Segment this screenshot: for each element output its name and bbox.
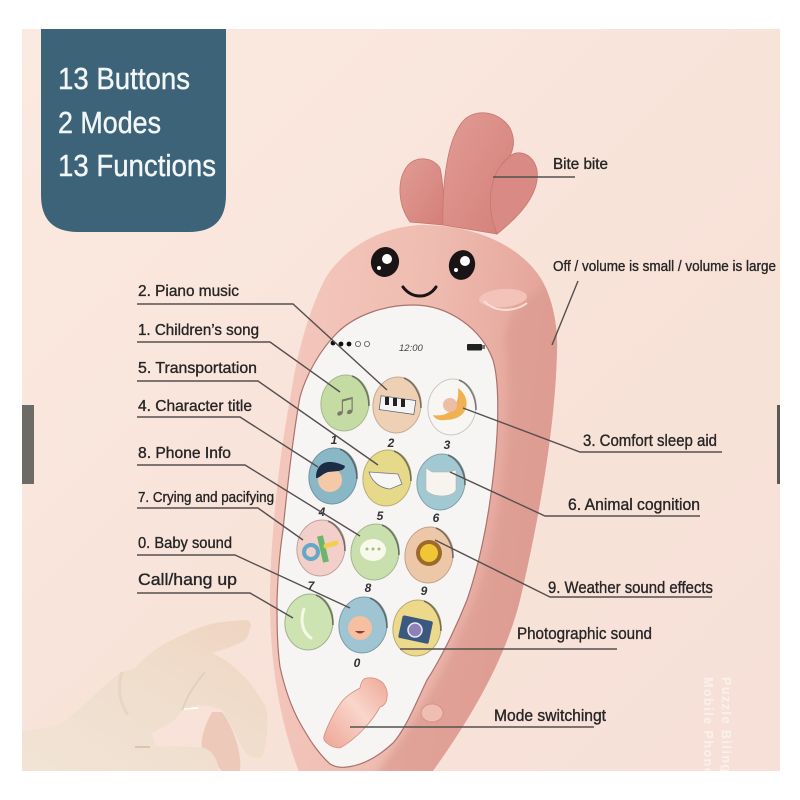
button 6: animal <box>416 454 466 522</box>
callout: volume switch <box>552 258 776 345</box>
button 5: transportation <box>362 450 412 520</box>
callout: bite bite: Bite bite <box>553 156 608 173</box>
back finger <box>202 712 240 771</box>
callout: weather sound effects: 9. Weather sound effects <box>548 578 713 597</box>
callout: baby sound: 0. Baby sound <box>138 535 232 552</box>
callout: crying and pacifying: 7. Crying and pacifying <box>138 490 274 506</box>
button 2: piano <box>372 376 422 447</box>
right edge bar <box>777 405 780 484</box>
button 3: comfort sleep <box>427 378 477 449</box>
callout: weather sound effects <box>435 540 713 597</box>
button: call <box>284 594 334 650</box>
feature summary panel <box>41 29 226 232</box>
callout: photographic sound: Photographic sound <box>517 624 652 643</box>
button 2: piano: 2 <box>387 436 395 450</box>
callout: phone info <box>137 445 360 536</box>
button 9: weather: 9 <box>421 584 428 598</box>
button 7: pacifier <box>296 520 346 590</box>
callout: piano music: 2. Piano music <box>138 283 239 300</box>
callout: bite bite <box>493 156 608 177</box>
button: camera <box>392 600 442 656</box>
callout: mode switching: Mode switchingt <box>494 706 606 725</box>
button 0: baby sound: 0 <box>354 656 361 670</box>
callout: children's song <box>137 322 340 392</box>
callout: animal cognition <box>450 472 700 516</box>
cheek <box>478 287 528 310</box>
phone toy <box>270 113 567 775</box>
mode switch carrot <box>324 678 387 748</box>
callout: comfort sleep aid <box>463 408 722 452</box>
eyes <box>370 247 476 280</box>
feature summary panel: 2 Modes <box>58 105 161 140</box>
status bar: 12:00 <box>399 343 423 354</box>
watermark <box>704 678 732 771</box>
button 7: pacifier: 7 <box>308 579 316 593</box>
feature summary panel: 13 Functions <box>58 148 216 183</box>
callout: phone info: 8. Phone Info <box>138 445 231 462</box>
callout: volume switch: Off / volume is small / volume is large <box>553 258 776 275</box>
side buttons <box>545 335 556 389</box>
callout: transportation <box>137 360 378 465</box>
button 8: phone info: 8 <box>365 581 372 595</box>
carrot leaves: bite teether <box>400 113 537 234</box>
screen <box>277 305 498 767</box>
callout: character title <box>137 398 318 467</box>
feature summary panel: 13 Buttons <box>58 61 190 96</box>
button 4: character <box>308 448 358 516</box>
button 6: animal: 6 <box>433 511 440 525</box>
callout: call/hang up: Call/hang up <box>138 570 237 589</box>
callout: character title: 4. Character title <box>138 398 252 415</box>
callout: baby sound <box>137 535 350 608</box>
callout: piano music <box>137 283 387 390</box>
status bar <box>330 340 485 351</box>
button 1: children's song: ♫ <box>333 386 357 422</box>
right rim shade <box>375 277 567 775</box>
callout: call/hang up <box>137 570 293 618</box>
phone body <box>270 225 557 775</box>
callout: transportation: 5. Transportation <box>138 360 257 377</box>
left edge bar <box>22 405 34 484</box>
button 3: comfort sleep: 3 <box>444 438 451 452</box>
watermark: Puzzle Biling <box>719 677 733 774</box>
button 4: character: 4 <box>318 505 326 519</box>
button 0: baby sound <box>338 596 388 667</box>
button 1: children's song: 1 <box>331 433 338 447</box>
watermark: Mobile Phone <box>701 677 715 776</box>
button 8: phone info <box>350 524 400 592</box>
body side dimple <box>421 704 443 722</box>
callout: crying and pacifying <box>137 490 303 540</box>
callout: animal cognition: 6. Animal cognition <box>568 495 700 514</box>
hand <box>76 620 268 771</box>
button 1: children's song <box>320 374 370 444</box>
smile <box>403 287 436 296</box>
button 9: weather <box>404 526 454 595</box>
callout: children's song: 1. Children’s song <box>138 322 259 339</box>
button 5: transportation: 5 <box>377 509 384 523</box>
callout: comfort sleep aid: 3. Comfort sleep aid <box>583 431 717 450</box>
